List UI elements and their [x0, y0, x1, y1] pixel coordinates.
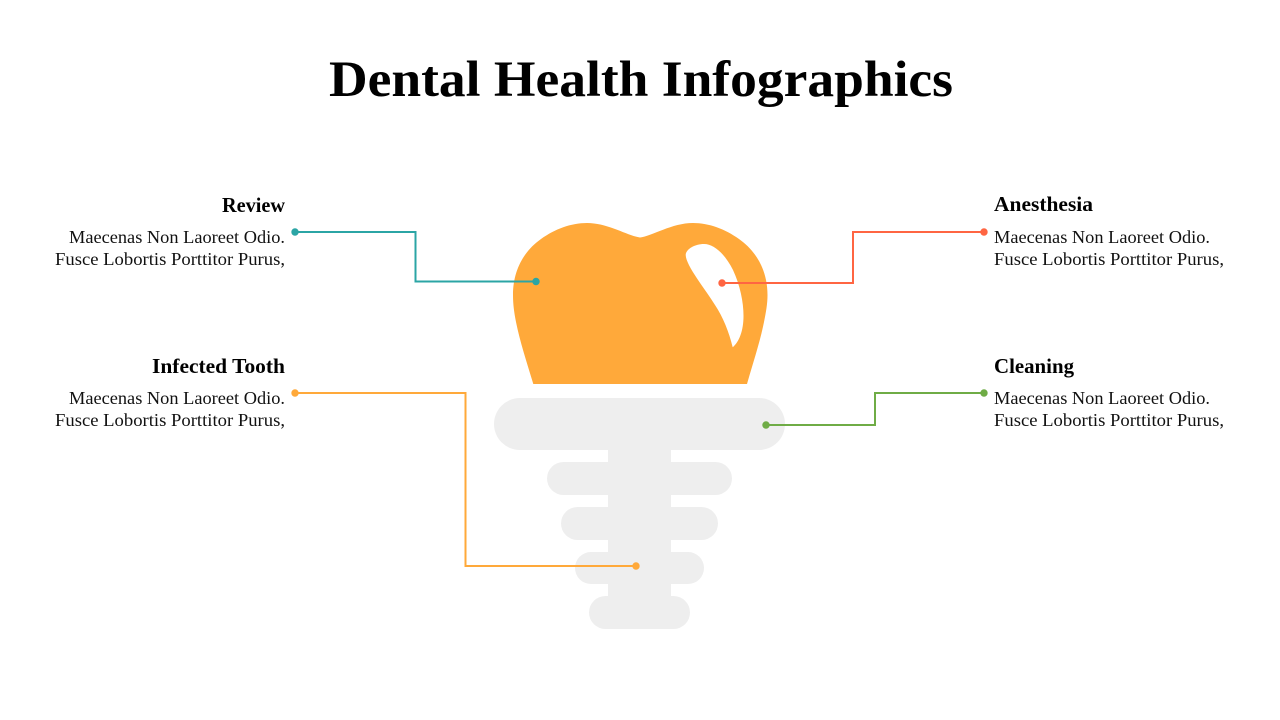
- text block: cleaning: Cleaning: [994, 354, 1074, 378]
- text block: review: Maecenas Non Laoreet Odio.: [69, 227, 285, 247]
- title: Dental Health Infographics: [329, 52, 953, 108]
- text block: anesthesia: Fusce Lobortis Porttitor Purus,: [994, 249, 1224, 269]
- text block: anesthesia: Anesthesia: [994, 192, 1094, 216]
- text block: review: Fusce Lobortis Porttitor Purus,: [55, 249, 285, 269]
- icon: dental implant screw: [494, 398, 785, 629]
- text block: infected tooth: [55, 354, 285, 430]
- connector: infected tooth: [291, 389, 640, 570]
- text block: anesthesia: Maecenas Non Laoreet Odio.: [994, 227, 1210, 247]
- text block: cleaning: Maecenas Non Laoreet Odio.: [994, 388, 1210, 408]
- text block: infected tooth: Infected Tooth: [152, 354, 285, 378]
- text block: cleaning: [994, 354, 1224, 430]
- text block: review: [55, 193, 286, 269]
- text block: infected tooth: Maecenas Non Laoreet Odio.: [69, 388, 285, 408]
- icon: tooth crown: [513, 223, 768, 384]
- text block: anesthesia: [994, 192, 1224, 269]
- text block: cleaning: Fusce Lobortis Porttitor Purus,: [994, 410, 1224, 430]
- connector: review: [291, 228, 540, 285]
- text block: infected tooth: Fusce Lobortis Porttitor Purus,: [55, 410, 285, 430]
- connector: anesthesia: [718, 228, 988, 287]
- connector: cleaning: [762, 389, 988, 429]
- text block: review: Review: [222, 193, 286, 217]
